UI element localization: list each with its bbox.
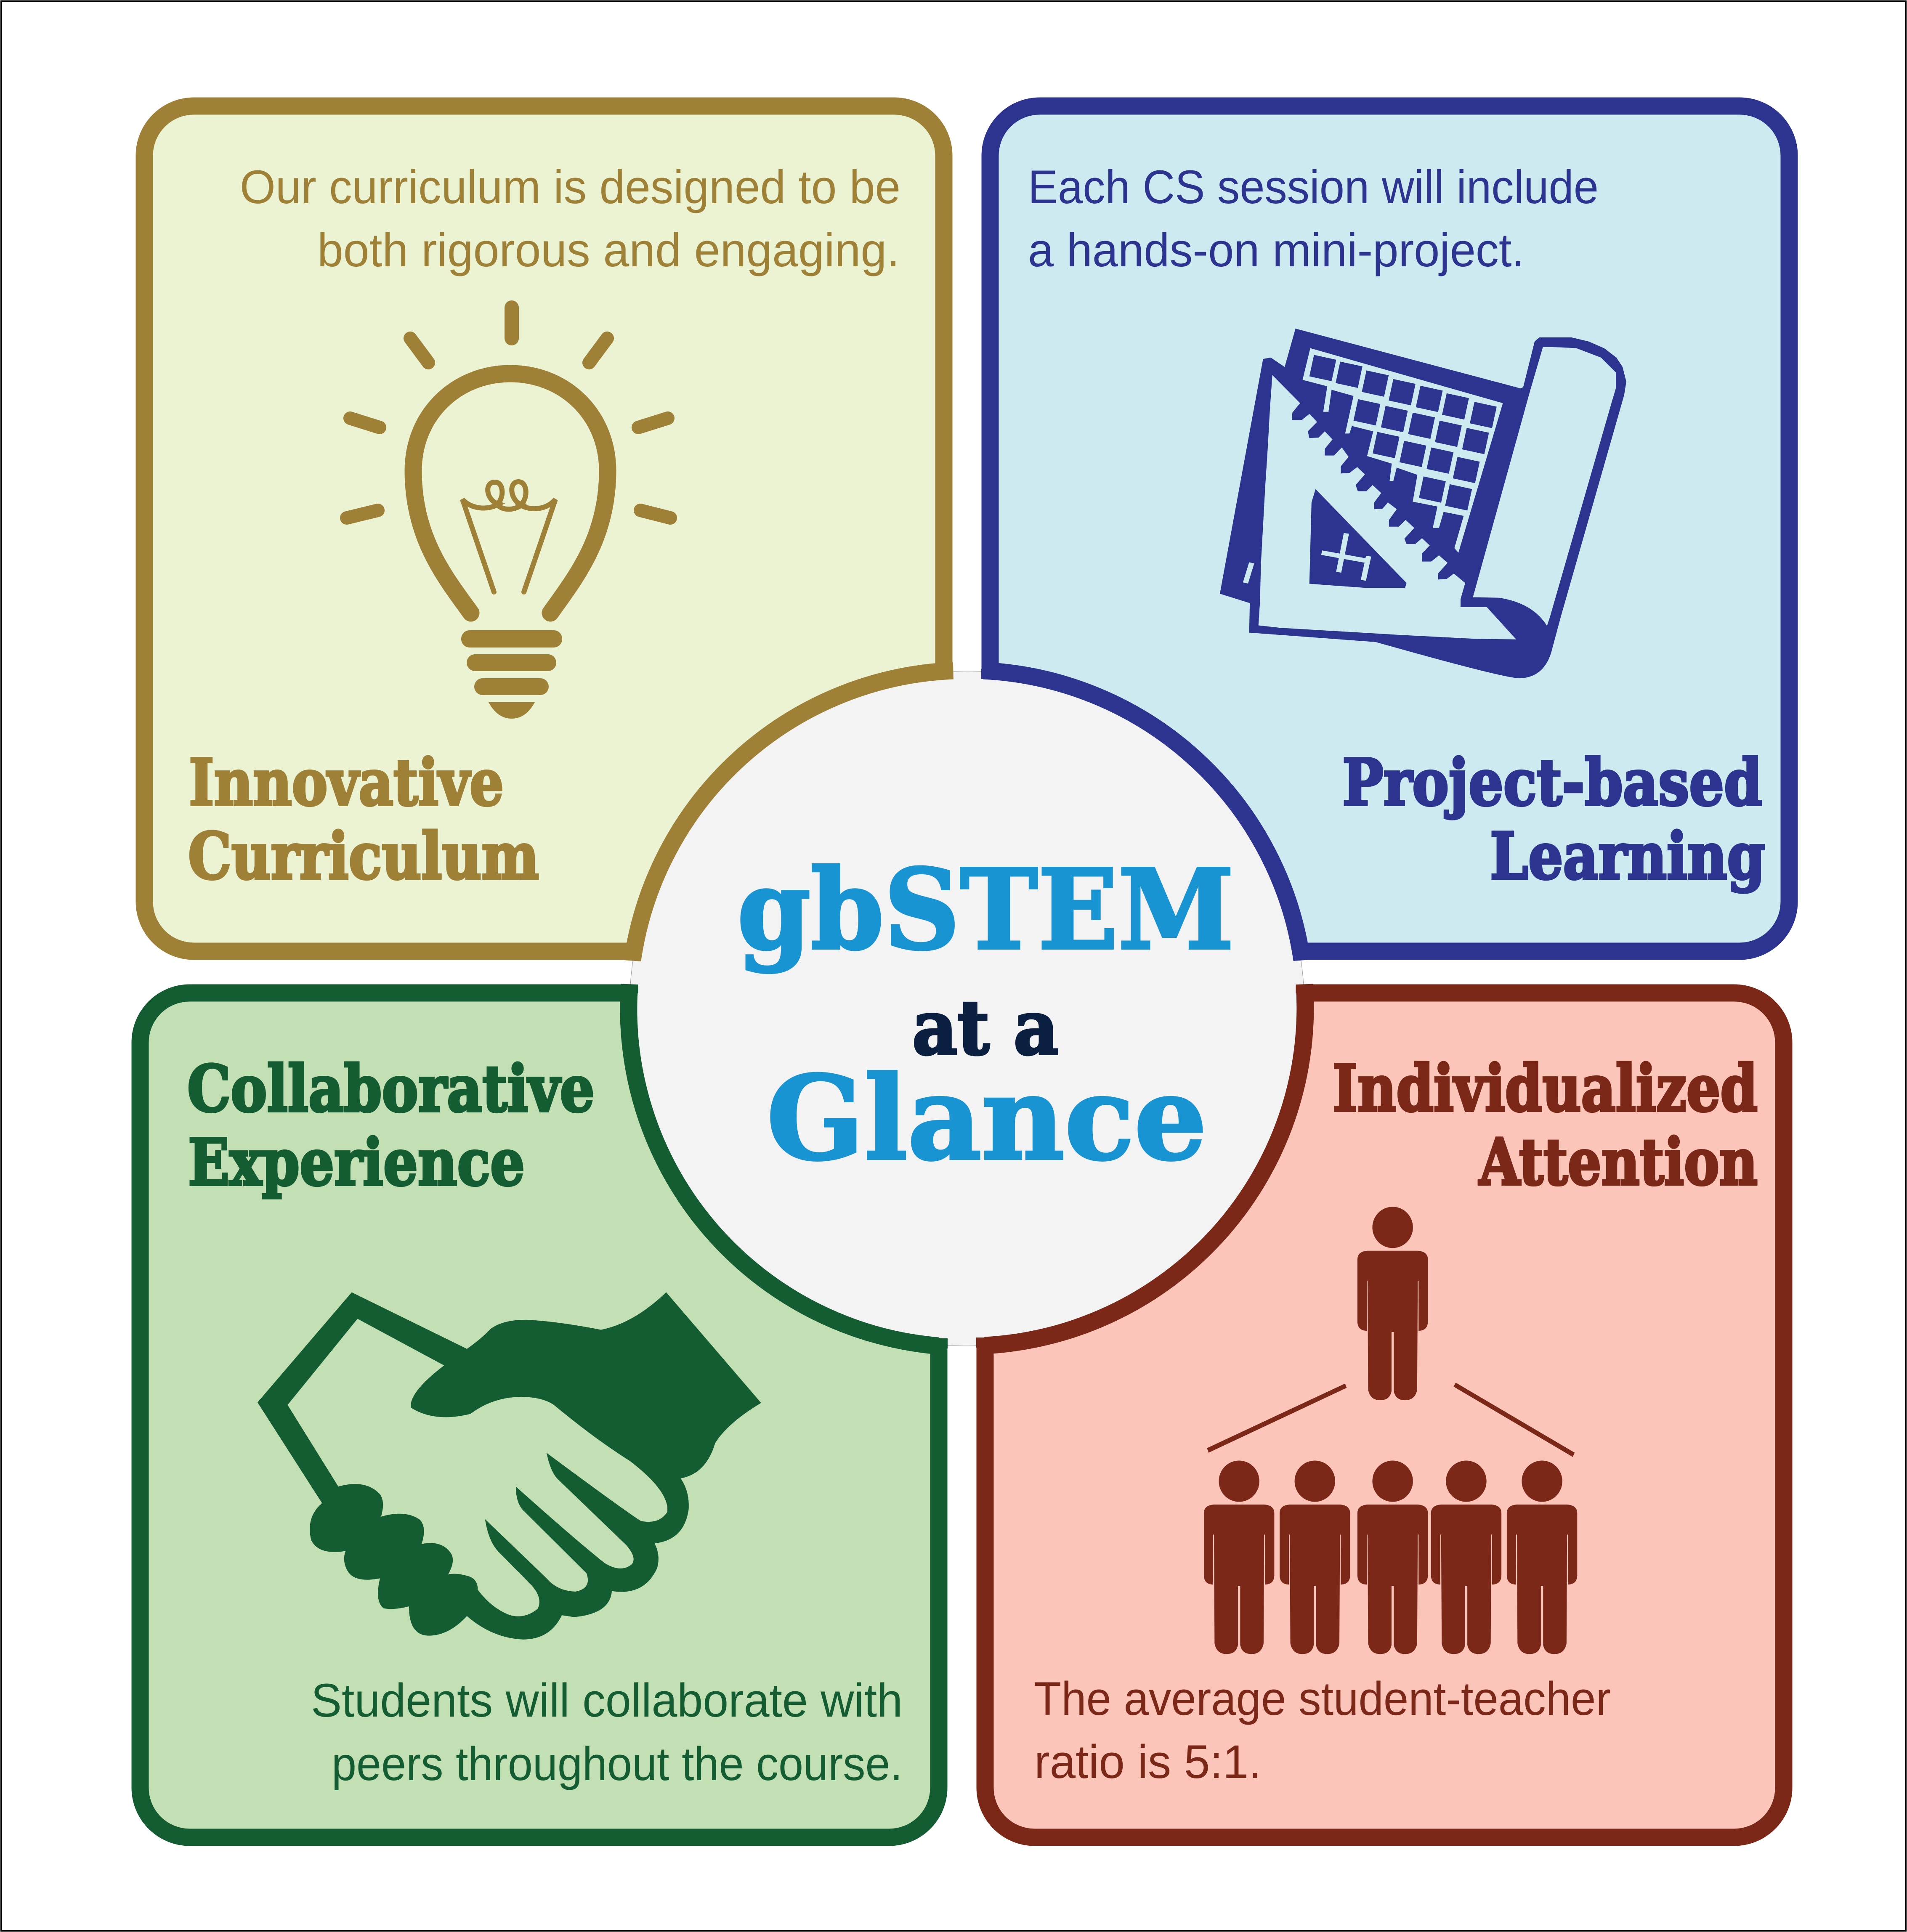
panel: individualized attention xyxy=(976,985,1784,1837)
person: student 5 xyxy=(1507,1461,1577,1654)
icon: blueprint scroll xyxy=(1220,329,1626,678)
center circle with title xyxy=(629,671,1304,1346)
heading: collaborative experience xyxy=(187,1051,595,1200)
title: Glance: Glance xyxy=(767,1051,1207,1186)
body text: ratio xyxy=(1034,1672,1611,1788)
heading: project-based learning xyxy=(1342,745,1765,894)
body text: project: Each CS session will include xyxy=(1028,161,1599,213)
icon: handshake xyxy=(258,1292,761,1640)
heading: innovative curriculum xyxy=(188,745,539,894)
person: student 1 xyxy=(1204,1461,1274,1654)
person: student 4 xyxy=(1431,1461,1501,1654)
body text: collaboration: Students will collaborate with xyxy=(311,1674,903,1727)
body text: project: a hands-on mini-project. xyxy=(1028,224,1525,276)
icon: light bulb xyxy=(347,308,670,719)
panel: project-based learning xyxy=(981,106,1789,960)
heading: collaborative experience: Experience xyxy=(188,1125,525,1200)
heading: individualized attention xyxy=(1333,1051,1758,1200)
body text: curriculum xyxy=(240,161,900,276)
body text: ratio: ratio is 5:1. xyxy=(1034,1736,1262,1788)
heading: individualized attention: Attention xyxy=(1478,1124,1758,1200)
body text: collaboration xyxy=(311,1674,903,1790)
body text: project xyxy=(1028,161,1599,276)
title: at a: at a xyxy=(912,984,1059,1072)
person: student 3 xyxy=(1357,1461,1428,1654)
title: gbSTEM: gbSTEM xyxy=(737,845,1234,974)
body text: collaboration: peers throughout the course. xyxy=(332,1738,903,1790)
panel: collaborative experience xyxy=(140,985,948,1837)
heading: project-based learning: Project-based xyxy=(1342,745,1762,820)
body text: curriculum: Our curriculum is designed to be xyxy=(240,161,900,213)
body text: ratio: The average student-teacher xyxy=(1034,1672,1611,1725)
connector lines xyxy=(1207,1383,1575,1457)
person: teacher xyxy=(1357,1207,1428,1400)
body text: curriculum: both rigorous and engaging. xyxy=(317,224,900,276)
person: student 2 xyxy=(1280,1461,1350,1654)
panel: innovative curriculum xyxy=(144,106,953,960)
heading: collaborative experience: Collaborative xyxy=(187,1051,595,1126)
icon: teacher and students xyxy=(1204,1207,1577,1654)
heading: project-based learning: Learning xyxy=(1490,818,1765,894)
heading: innovative curriculum: Curriculum xyxy=(188,818,539,894)
heading: innovative curriculum: Innovative xyxy=(189,745,504,820)
heading: individualized attention: Individualized xyxy=(1333,1051,1758,1126)
